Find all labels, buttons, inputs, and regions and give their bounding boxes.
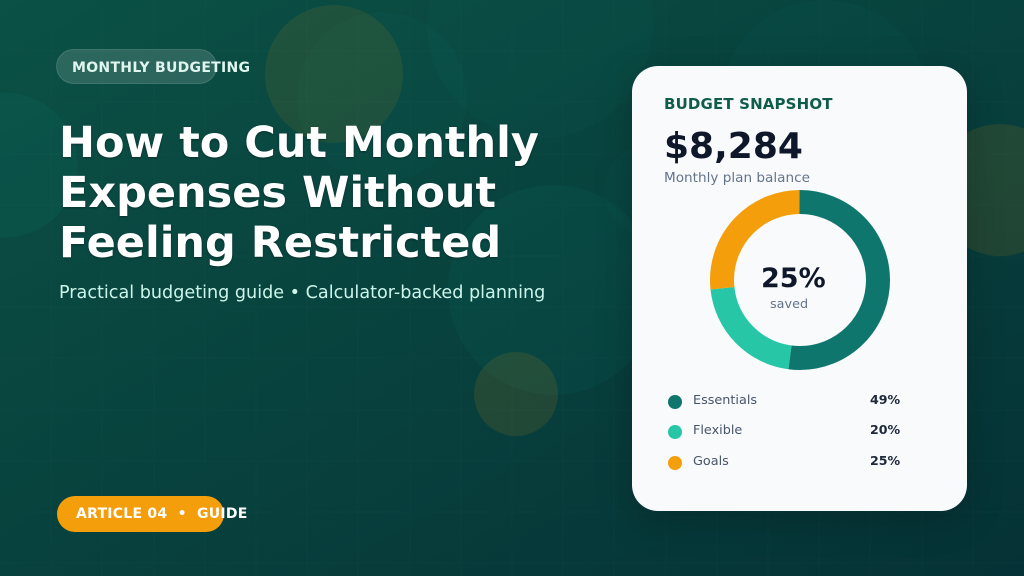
legend: essentials — [668, 392, 901, 409]
legend: essentials: Essentials — [693, 393, 757, 408]
legend: flexible — [668, 422, 901, 439]
subtitle: Practical budgeting guide • Calculator-backed planning — [59, 283, 545, 303]
panel: budget snapshot card — [632, 66, 967, 511]
legend: goals: Goals — [693, 454, 729, 469]
balance caption: Monthly plan balance — [664, 170, 810, 186]
title: How to Cut Monthly — [59, 118, 539, 168]
legend: flexible: 20% — [870, 422, 901, 437]
legend: essentials: 49% — [870, 392, 901, 407]
legend: goals — [668, 453, 901, 470]
donut caption: saved — [770, 297, 808, 312]
donut chart — [722, 202, 878, 358]
card heading: BUDGET SNAPSHOT — [664, 95, 833, 113]
title: Expenses Without — [59, 168, 496, 218]
category pill: MONTHLY BUDGETING — [72, 60, 250, 76]
donut value: 25% — [761, 263, 826, 294]
category pill — [56, 50, 250, 84]
title — [59, 118, 539, 268]
article pill — [57, 496, 248, 532]
title: Feeling Restricted — [59, 218, 501, 268]
legend: goals: 25% — [870, 453, 901, 468]
background circles — [0, 0, 1024, 436]
article pill: ARTICLE 04 • GUIDE — [76, 506, 248, 522]
balance amount: $8,284 — [664, 126, 803, 167]
legend: flexible: Flexible — [693, 423, 742, 438]
